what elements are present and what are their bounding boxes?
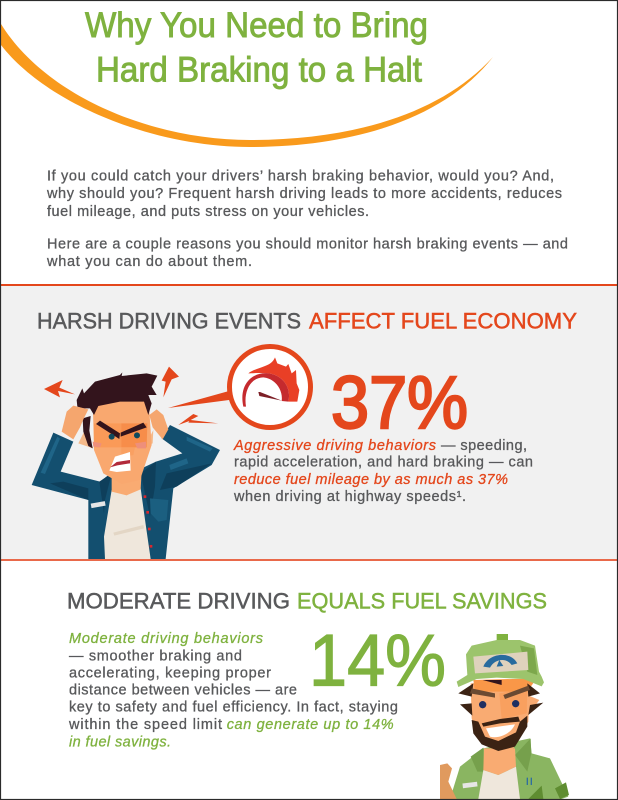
heading: harsh driving events: HARSH DRIVING EVENTS [37, 308, 301, 334]
title: Why You Need to Bring [85, 5, 428, 45]
cap logo [483, 655, 517, 668]
heading: harsh driving events [37, 308, 577, 334]
ears [527, 695, 539, 715]
jacket [32, 425, 220, 559]
text: aggressive driving: rapid acceleration, and hard braking — can [234, 455, 533, 471]
bolt right [178, 414, 218, 425]
title: Hard Braking to a Halt [96, 50, 422, 90]
cap badge [473, 652, 528, 673]
name badge [462, 782, 478, 788]
title [85, 5, 428, 90]
heading: harsh driving events: AFFECT FUEL ECONOMY [309, 308, 577, 334]
shirt jacket [450, 738, 568, 799]
text: aggressive driving: Aggressive driving behaviors [233, 438, 436, 454]
face [93, 397, 152, 484]
text: aggressive driving [233, 438, 533, 505]
text: moderate driving: key to safety and fuel efficiency. In fact, staying [69, 700, 398, 716]
buttons [144, 495, 152, 548]
mouth [109, 452, 131, 472]
heading: moderate driving: EQUALS FUEL SAVINGS [297, 588, 547, 614]
hair [458, 683, 543, 716]
neck [112, 470, 142, 495]
lightning bolts [44, 367, 218, 425]
pens [527, 778, 532, 785]
flames [248, 357, 299, 402]
intro text: fuel mileage, and puts stress on your vehicles. [47, 204, 369, 220]
heading: moderate driving: MODERATE DRIVING [67, 588, 290, 614]
text: moderate driving: distance between vehicles — are [69, 682, 297, 698]
dial [242, 373, 289, 407]
intro text: what you can do about them. [46, 254, 252, 270]
bolt top [162, 367, 179, 397]
cap [457, 634, 544, 687]
right hand [149, 409, 168, 439]
heading: moderate driving [67, 588, 547, 614]
text: moderate driving: in fuel savings. [69, 734, 171, 750]
text: moderate driving: accelerating, keeping proper [69, 666, 271, 682]
text: aggressive driving: when driving at highway speeds¹. [233, 489, 466, 505]
stat: 37%: 37% [331, 361, 468, 444]
brows [470, 686, 530, 699]
speech pointer [168, 391, 229, 408]
shirt [104, 488, 151, 559]
thumb hand [440, 763, 457, 799]
t-shirt [478, 767, 520, 799]
illustration: happy driver [440, 634, 569, 799]
panel: harsh driving background [0, 284, 618, 561]
intro text: why should you? Frequent harsh driving leads to more accidents, reduces [46, 186, 562, 202]
ears [78, 430, 153, 448]
text: moderate driving [68, 631, 398, 750]
name badge [91, 501, 106, 508]
left hand [62, 406, 88, 439]
stat: 14%: 14% [309, 621, 446, 702]
mouth [486, 724, 515, 737]
text: aggressive driving: — speeding, [441, 438, 527, 454]
needle [258, 392, 282, 401]
collar [99, 462, 156, 517]
sideburn [83, 416, 93, 448]
orange swoosh [1, 24, 493, 147]
eyes [479, 700, 519, 708]
beard [472, 716, 527, 751]
icon: speedometer on fire [230, 346, 310, 428]
text: moderate driving: — smoother braking and [69, 649, 242, 665]
intro text: If you could catch your drivers’ harsh braking behavior, would you? And, [47, 168, 554, 184]
text: moderate driving: can generate up to 14% [227, 717, 394, 733]
text: moderate driving: Moderate driving behaviors [69, 631, 263, 647]
text: moderate driving: within the speed limit [68, 717, 222, 733]
face [471, 682, 530, 751]
text: aggressive driving: reduce fuel mileage by as much as 37% [234, 472, 508, 488]
bolt left [44, 380, 75, 397]
pocket [150, 498, 168, 522]
eyes [109, 432, 140, 440]
illustration: angry driver [32, 372, 220, 559]
neck [483, 748, 516, 775]
intro text: Here are a couple reasons you should monitor harsh braking events — and [47, 236, 568, 252]
hair [77, 372, 157, 415]
intro text [46, 168, 568, 270]
brows [96, 421, 147, 439]
